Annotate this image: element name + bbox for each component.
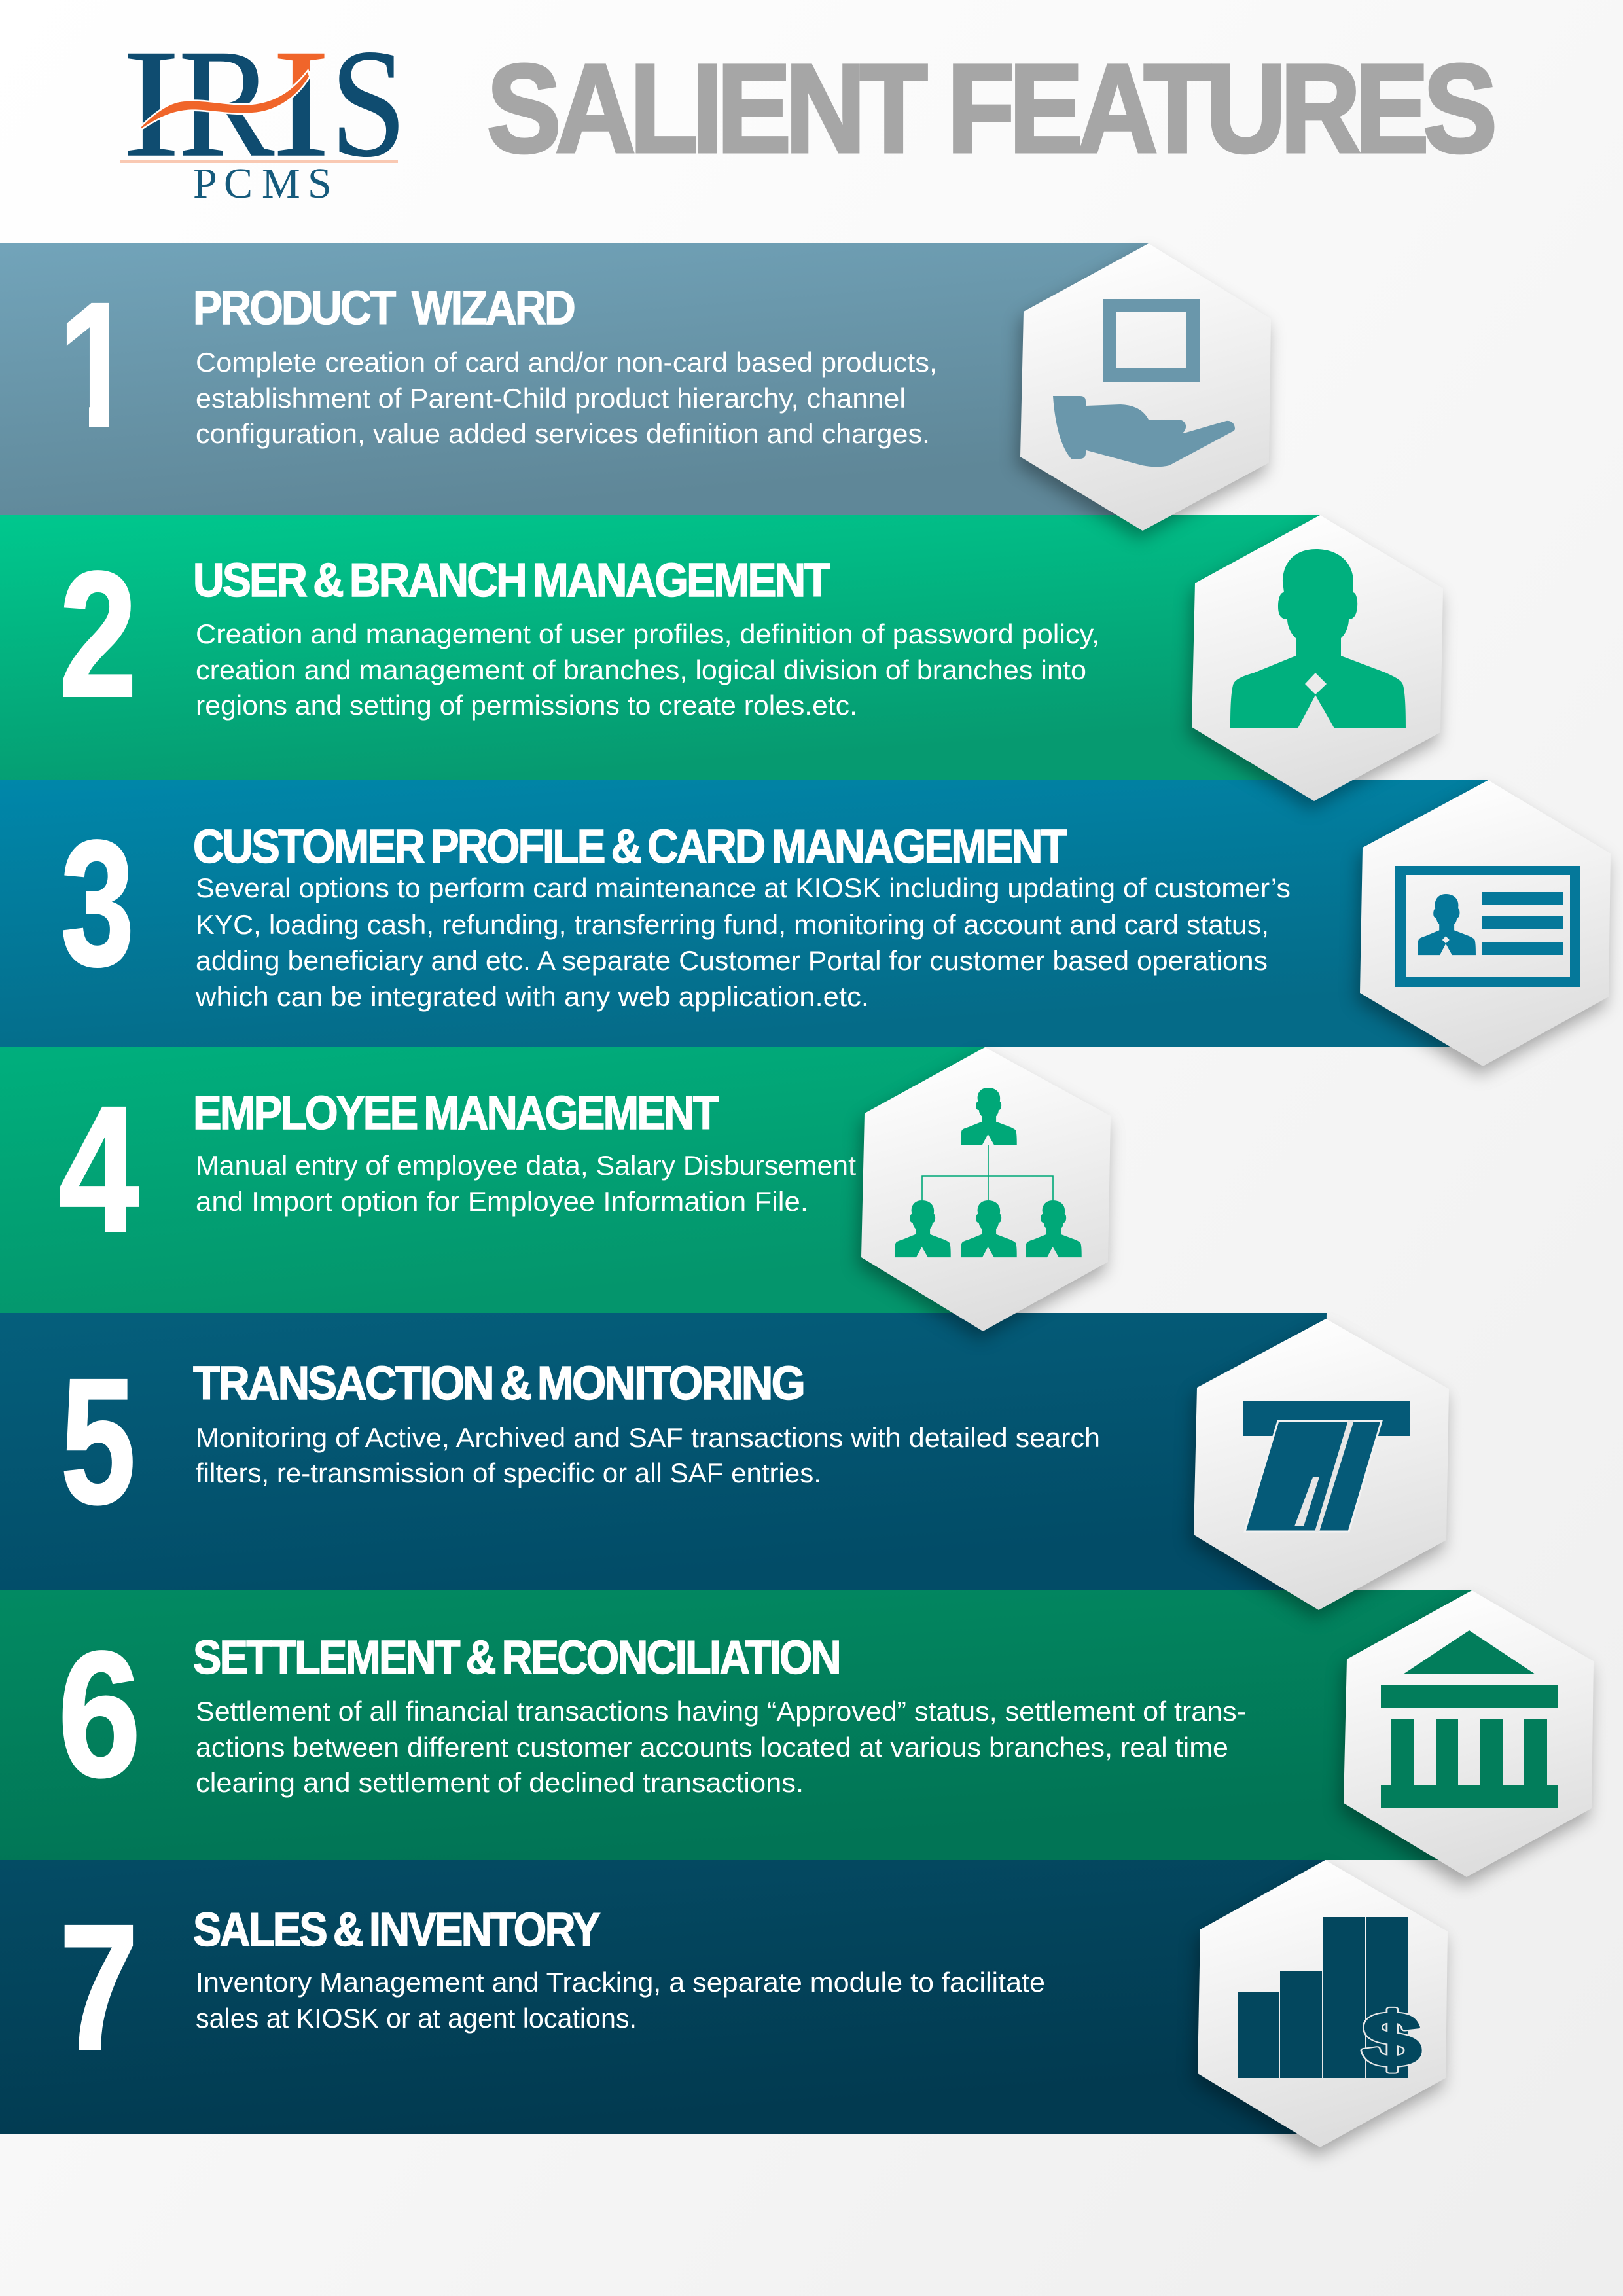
title: SALIENT FEATURES (487, 38, 1493, 179)
panel: customer profile and card management (0, 780, 1488, 1047)
body text: Complete creation of card and/or non-card based products, (196, 347, 937, 378)
icon hexagon 2: person (1192, 515, 1443, 801)
icon: hand with card (1053, 299, 1235, 467)
panel: settlement and reconciliation (0, 1590, 1472, 1860)
logo wordmark IRIS: I (122, 18, 180, 189)
icon hexagon 6: bank (1344, 1590, 1594, 1877)
body text: and Import option for Employee Information File. (196, 1186, 808, 1217)
body text: configuration, value added services definition and charges. (196, 418, 930, 449)
heading: SALES & INVENTORY (193, 1904, 600, 1956)
logo orange swoosh (141, 72, 309, 129)
logo underline (120, 160, 398, 163)
icon: bar chart with dollar (1238, 1917, 1421, 2082)
hexagon background (1192, 515, 1443, 801)
logo wordmark IRIS: I (272, 18, 330, 189)
hexagon background (1194, 1319, 1449, 1610)
hexagon background (861, 1047, 1111, 1331)
body text: filters, re-transmission of specific or all SAF entries. (196, 1458, 821, 1488)
logo wordmark IRIS: S (330, 18, 406, 189)
band 2 (0, 515, 1320, 780)
number 3: 3 (61, 804, 134, 1003)
band 6 (0, 1590, 1472, 1860)
band 4 (0, 1047, 985, 1313)
body text (196, 619, 1099, 721)
body text: sales at KIOSK or at agent locations. (196, 2003, 637, 2034)
body text: Manual entry of employee data, Salary Disbursement (196, 1150, 856, 1181)
number 5: 5 (61, 1342, 135, 1541)
panel: user and branch management (0, 515, 1320, 780)
band 3 (0, 780, 1488, 1047)
panel: employee management (0, 1047, 985, 1313)
logo wordmark IRIS: I (272, 18, 330, 189)
body text: establishment of Parent-Child product hierarchy, channel (196, 383, 906, 414)
number 2: 2 (60, 535, 137, 734)
icon: id card (1395, 866, 1580, 987)
body text: creation and management of branches, logical division of branches into (196, 655, 1086, 685)
logo wordmark IRIS: R (179, 18, 275, 189)
icon: bar chart with dollar: $ (1363, 1997, 1421, 2082)
body text (196, 1967, 1045, 2034)
heading: TRANSACTION & MONITORING (193, 1357, 804, 1410)
body text: Settlement of all financial transactions having “Approved” status, settlement of trans- (196, 1696, 1246, 1727)
heading: CUSTOMER PROFILE & CARD MANAGEMENT (193, 821, 1067, 873)
icon hexagon 1: hand holding card (1020, 243, 1271, 531)
number 1: 1 (58, 266, 135, 465)
icon hexagon 3: id card (1360, 780, 1611, 1066)
number 4: 4 (59, 1069, 139, 1268)
body text: Creation and management of user profiles, definition of password policy, (196, 619, 1099, 649)
icon hexagon 7: sales chart (1198, 1860, 1448, 2147)
body text (196, 1422, 1100, 1488)
body text: which can be integrated with any web application.etc. (195, 981, 869, 1012)
heading: EMPLOYEE MANAGEMENT (193, 1087, 719, 1139)
body text (196, 1696, 1246, 1798)
number 7: 7 (60, 1888, 138, 2087)
body text: adding beneficiary and etc. A separate Customer Portal for customer based operations (196, 945, 1268, 976)
hexagon background (1344, 1590, 1594, 1877)
body text: actions between different customer accounts located at various branches, real time (196, 1732, 1228, 1763)
heading: USER & BRANCH MANAGEMENT (193, 554, 830, 607)
body text: KYC, loading cash, refunding, transferring fund, monitoring of account and card status, (196, 909, 1269, 940)
panel: transaction and monitoring (0, 1313, 1327, 1590)
logo subtitle PCMS: PCMS (193, 160, 332, 207)
body text: regions and setting of permissions to create roles.etc. (196, 690, 857, 721)
body text: Monitoring of Active, Archived and SAF transactions with detailed search (196, 1422, 1100, 1453)
icon: bank building (1381, 1630, 1558, 1808)
body text: clearing and settlement of declined transactions. (196, 1767, 804, 1798)
heading: SETTLEMENT & RECONCILIATION (193, 1632, 840, 1684)
band 7 (0, 1860, 1325, 2134)
icon hexagon 4: organisation chart (861, 1047, 1111, 1331)
icon: bar chart with dollar: $ (1363, 1997, 1421, 2082)
body text: Several options to perform card maintenance at KIOSK including updating of customer’s (196, 872, 1291, 903)
icon: person with tie (1230, 549, 1406, 728)
band 1 (0, 243, 1149, 515)
panel: sales and inventory (0, 1860, 1325, 2134)
number 6: 6 (58, 1615, 141, 1814)
panel: product wizard (0, 243, 1149, 515)
icon: org chart (895, 1088, 1082, 1257)
body text: Inventory Management and Tracking, a separate module to facilitate (196, 1967, 1045, 1998)
hexagon background (1198, 1860, 1448, 2147)
body text (196, 347, 937, 449)
icon hexagon 5: card in slot (1194, 1319, 1449, 1610)
logo: IRIS PCMS (120, 52, 399, 198)
body text (195, 872, 1291, 1012)
icon: card reader (1243, 1401, 1410, 1532)
heading: PRODUCT WIZARD (193, 282, 574, 334)
logo wordmark IRIS (128, 52, 399, 157)
band 5 (0, 1313, 1327, 1590)
body text (196, 1150, 856, 1217)
hexagon background (1360, 780, 1611, 1066)
hexagon background (1020, 243, 1271, 531)
